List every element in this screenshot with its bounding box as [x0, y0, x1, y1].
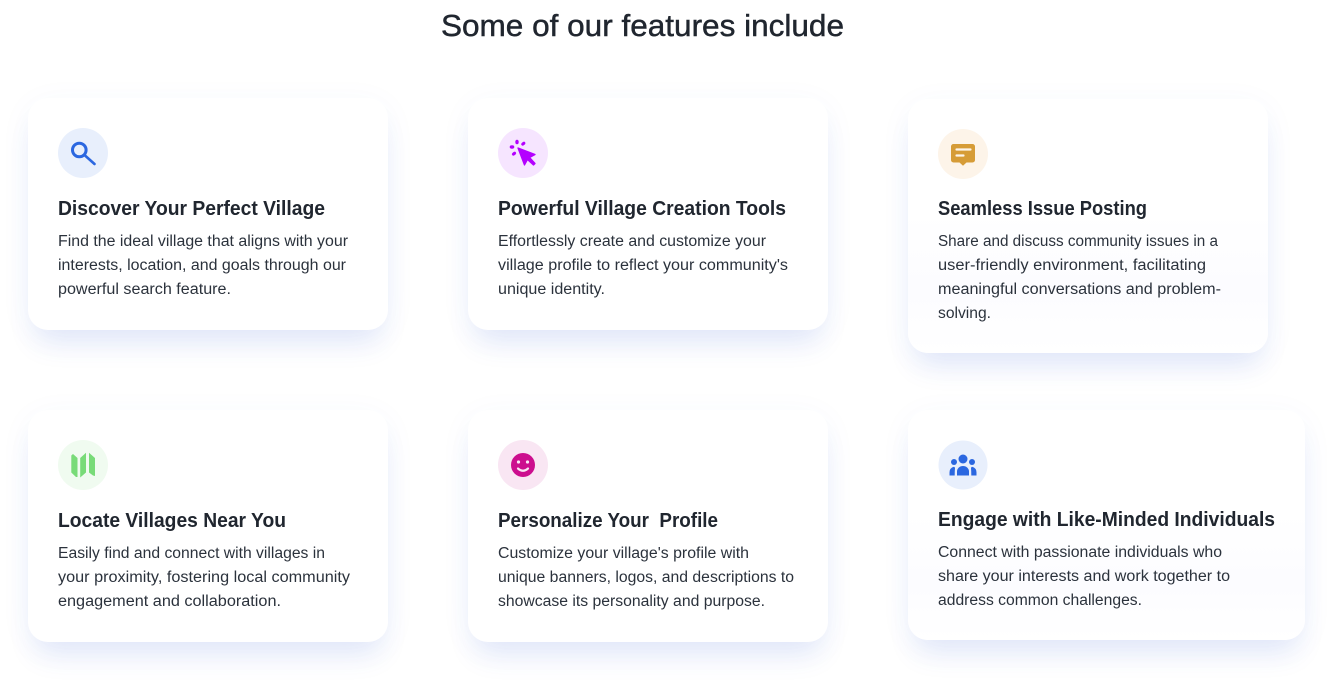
heading: Powerful Village Creation Tools — [498, 198, 786, 220]
body text: share your interests and work together to — [938, 568, 1230, 585]
panel: engage with like-minded individuals — [908, 410, 1305, 640]
panel: personalize your profile — [468, 410, 828, 642]
icon: search — [58, 128, 108, 178]
icon: cursor click — [498, 128, 548, 178]
body text: Customize your village's profile with — [498, 545, 749, 562]
body text: address common challenges. — [938, 592, 1142, 609]
body text: showcase its personality and purpose. — [498, 593, 765, 610]
body text: village profile to reflect your community's — [498, 257, 788, 274]
body text — [498, 545, 794, 610]
body text: user-friendly environment, facilitating — [938, 257, 1206, 274]
body text: Share and discuss community issues in a — [938, 233, 1218, 250]
body text — [938, 544, 1230, 609]
body text: Find the ideal village that aligns with your — [58, 233, 348, 250]
body text: unique banners, logos, and descriptions to — [498, 569, 794, 586]
icon: map — [58, 440, 108, 490]
body text: powerful search feature. — [58, 281, 231, 298]
panel: seamless issue posting — [908, 99, 1268, 353]
panel: locate villages near you — [28, 410, 388, 642]
body text: solving. — [938, 305, 991, 322]
body text: engagement and collaboration. — [58, 593, 281, 610]
panel: powerful village creation tools — [468, 98, 828, 330]
body text: interests, location, and goals through our — [58, 257, 346, 274]
panel: discover your perfect village — [28, 98, 388, 330]
title: Some of our features include — [441, 8, 844, 43]
heading: Personalize Your Profile — [498, 510, 718, 532]
icon: group of people — [938, 440, 988, 490]
heading: Seamless Issue Posting — [938, 198, 1147, 220]
heading: Discover Your Perfect Village — [58, 198, 325, 220]
body text: unique identity. — [498, 281, 605, 298]
body text: Easily find and connect with villages in — [58, 545, 325, 562]
icon: chat message — [938, 129, 988, 179]
body text — [58, 545, 350, 610]
body text: your proximity, fostering local community — [58, 569, 350, 586]
body text — [938, 233, 1221, 322]
heading: Engage with Like-Minded Individuals — [938, 509, 1275, 531]
heading: Locate Villages Near You — [58, 510, 286, 532]
body text — [498, 233, 788, 298]
body text: Connect with passionate individuals who — [938, 544, 1222, 561]
body text: meaningful conversations and problem- — [938, 281, 1221, 298]
body text: Effortlessly create and customize your — [498, 233, 766, 250]
body text — [58, 233, 348, 298]
icon: smiley face — [498, 440, 548, 490]
